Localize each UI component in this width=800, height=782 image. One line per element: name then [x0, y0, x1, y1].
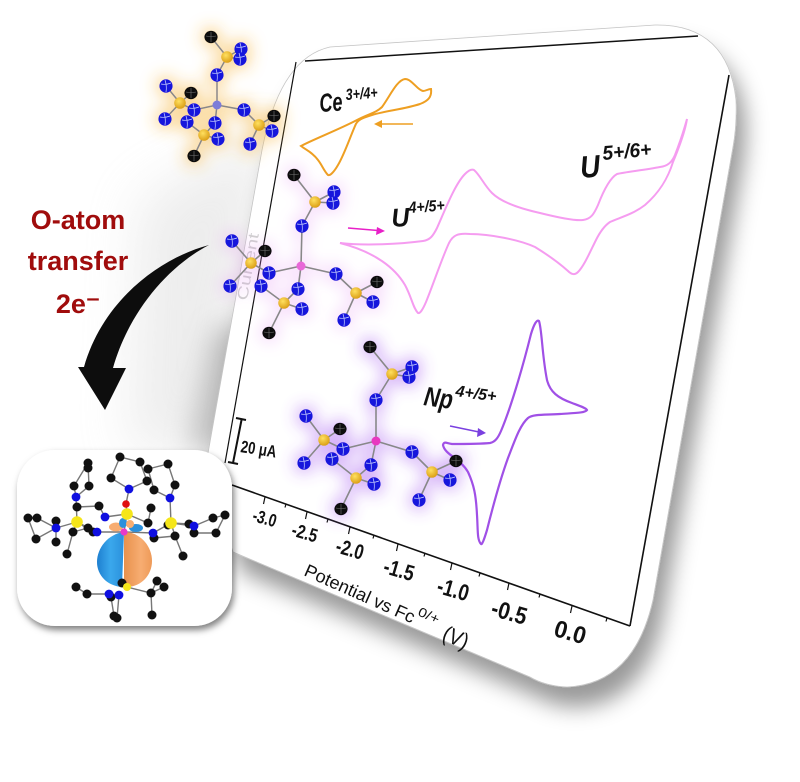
molecule: Ce complex	[158, 31, 281, 162]
chart: cyclic voltammetry plot	[225, 36, 729, 654]
label: U 4+/5+: U	[390, 202, 412, 233]
curve: U redox couples	[340, 119, 687, 313]
axis tick labels: -2.0	[333, 535, 366, 565]
x-axis title	[301, 560, 473, 654]
neptunium centre	[120, 528, 128, 536]
axis tick labels: -1.0	[434, 572, 472, 606]
curve: Np 4+/5+	[443, 321, 587, 544]
arrow: Np scan direction	[450, 426, 486, 437]
axis tick labels: -3.0	[250, 505, 279, 531]
plot frame axes	[225, 36, 729, 626]
label: Np 4+/5+: Np	[422, 381, 455, 415]
carbon atoms	[24, 452, 230, 622]
molecule: U complex	[223, 169, 384, 339]
axis tick labels: -2.5	[289, 520, 320, 547]
axis tick labels: -1.5	[381, 554, 417, 586]
heading: O-atom transfer 2e-	[28, 205, 129, 319]
panel: product structure card	[17, 450, 232, 626]
x-axis title: Potential vs Fc	[301, 560, 418, 627]
product bonds	[28, 457, 225, 618]
label: U 5+/6+	[579, 139, 653, 185]
orbital lobes	[97, 518, 152, 587]
x-axis title: 0/+	[416, 604, 442, 627]
silicon atoms	[71, 508, 177, 591]
label: Np 4+/5+	[422, 381, 497, 415]
label: U 5+/6+: U	[579, 148, 603, 185]
oxo oxygen atom	[122, 500, 130, 508]
axis tick labels	[250, 505, 589, 650]
faint y-axis title: Current	[234, 231, 263, 302]
label: U 4+/5+: 4+/5+	[407, 198, 445, 217]
label: Ce 3+/4+	[318, 85, 378, 118]
scale bar: 20 microamps	[228, 418, 278, 464]
x-axis title: (V)	[439, 621, 473, 654]
background shadow behind the panel	[130, 130, 275, 450]
curve: Ce 3+/4+	[301, 79, 431, 175]
arrow: U scan direction	[348, 227, 385, 235]
label: U 4+/5+	[390, 198, 445, 233]
scale bar: 20 microamps: 20 μA	[239, 437, 278, 462]
nitrogen atoms	[52, 485, 198, 599]
axis tick labels: -0.5	[488, 595, 530, 631]
arrow: Ce scan direction	[374, 120, 413, 128]
heading: O-atom transfer 2e-: transfer	[28, 246, 129, 276]
axis tick labels: 0.0	[551, 615, 589, 650]
label: Ce 3+/4+: Ce	[318, 86, 343, 118]
arrow: reaction arrow	[78, 245, 209, 410]
panel: voltammogram card	[205, 25, 736, 687]
label: U 5+/6+: 5+/6+	[602, 139, 653, 165]
molecule: Np complex	[297, 341, 463, 515]
label: Ce 3+/4+: 3+/4+	[345, 85, 378, 104]
label: Np 4+/5+: 4+/5+	[453, 383, 497, 406]
heading: O-atom transfer 2e-: O-atom	[31, 205, 125, 235]
heading: O-atom transfer 2e-: 2e⁻	[56, 289, 100, 319]
